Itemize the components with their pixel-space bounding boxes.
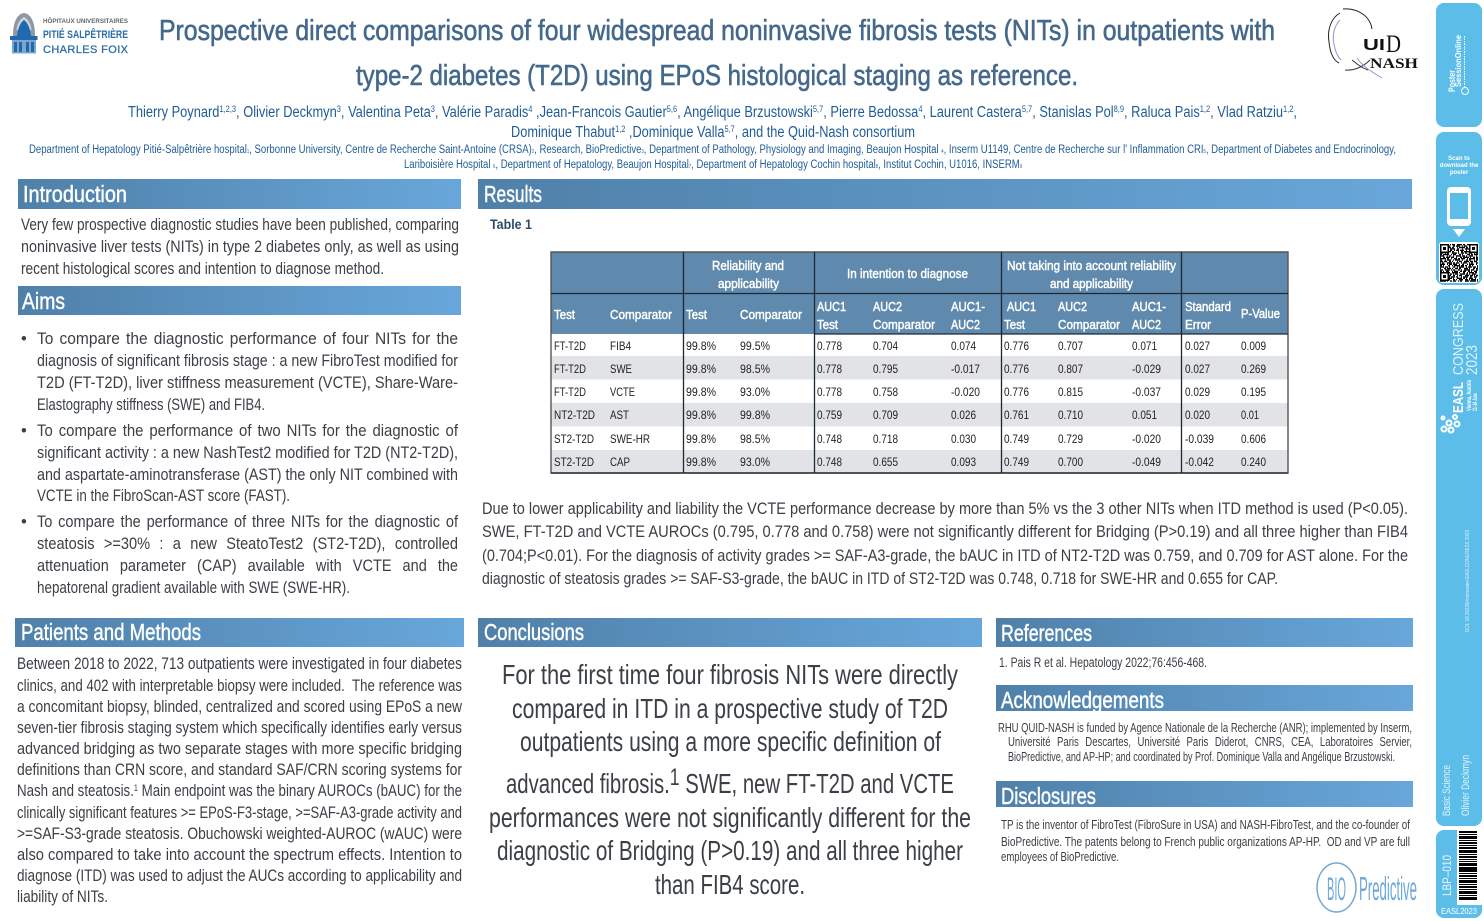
panel: references: References bbox=[1001, 620, 1092, 646]
panel: results: Table 1 bbox=[490, 217, 532, 232]
table header: AUC1 bbox=[817, 300, 846, 314]
table header: P-Value bbox=[1241, 307, 1280, 321]
table row 4: 0.026 bbox=[951, 408, 976, 422]
table row 1 bbox=[554, 339, 1266, 353]
table row 1: 0.704 bbox=[873, 339, 898, 353]
table row 6: -0.049 bbox=[1132, 455, 1161, 469]
panel: patients and methods: Between 2018 to 2022, 713 outpatients were investigated in four diabetes bbox=[17, 655, 462, 673]
table row 2: 0.027 bbox=[1185, 362, 1210, 376]
table row 5: 0.749 bbox=[1004, 432, 1029, 446]
authors: 5,7 bbox=[724, 124, 735, 134]
panel: aims: hepatorenal gradient available with SWE (SWE-HR). bbox=[37, 579, 350, 597]
table row 3: 0.776 bbox=[1004, 385, 1029, 399]
table row 2: FT-T2D bbox=[554, 362, 586, 376]
affiliations: Department of Hepatology Pitié-Salpêtrière hospital1, Sorbonne University, Centre de Recherche Saint-Antoine (CRSA)2, Research, BioPredictive3, Department of Pathology, Physiology and Imaging, Beaujon Hospital 4, Inserm U1149, Centre de Recherche sur l' Inflammation CRI5, Department of Diabetes and Endocrinology, bbox=[29, 144, 1396, 156]
panel: patients and methods: >=SAF-S3-grade steatosis. Obuchowski weighted-AUROC (wAUC) were bbox=[17, 825, 462, 843]
affiliations: Lariboisière Hospital 6, Department of Hepatology, Beaujon Hospital7, Department of Hepatology Cochin hospital8, Institut Cochin, U1016, INSERM9 bbox=[404, 159, 1022, 171]
authors: 3 bbox=[337, 104, 341, 114]
table row 1: FT-T2D bbox=[554, 339, 586, 353]
panel: conclusions: performances were not significantly different for the bbox=[489, 802, 971, 833]
panel: patients and methods: diagnose (ITD) was used to adjust the AUCs according to applicability and bbox=[17, 867, 462, 885]
panel: patients and methods: 1 bbox=[134, 783, 138, 793]
logo: UID NASH: D bbox=[1386, 31, 1401, 58]
panel: patients and methods: definitions than CRN score, and standard SAF/CRN scoring systems for bbox=[17, 761, 462, 779]
table row 3: FT-T2D bbox=[554, 385, 586, 399]
table row 2: 0.795 bbox=[873, 362, 898, 376]
table row 1: 99.8% bbox=[686, 339, 716, 353]
table header: and applicability bbox=[1050, 277, 1134, 291]
table row 2 bbox=[554, 362, 1266, 376]
table header: Comparator bbox=[1058, 318, 1120, 332]
table row 5: 0.748 bbox=[817, 432, 842, 446]
panel: conclusions: SWE, new FT-T2D and VCTE bbox=[680, 768, 954, 799]
logo: UID NASH: NASH bbox=[1370, 56, 1418, 72]
panel: patients and methods: clinics, and 402 with interpretable biopsy were included. The reference was bbox=[17, 677, 462, 695]
panel: patients and methods: a concomitant biopsy, blinded, centralized and scored using EPoS a new bbox=[17, 698, 462, 716]
icon: EASL flower bbox=[1442, 415, 1460, 432]
table row 4 bbox=[554, 408, 1259, 422]
table header: Comparator bbox=[873, 318, 935, 332]
logo: Pitié Salpêtrière Charles Foix bbox=[10, 13, 129, 56]
table row 6: 0.093 bbox=[951, 455, 976, 469]
table header: Not taking into account reliability bbox=[1007, 259, 1177, 273]
panel: patients and methods: clinically significant features >= EPoS-F3-stage, >=SAF-A3-grade activity and bbox=[17, 804, 462, 822]
table row 5: 98.5% bbox=[740, 432, 770, 446]
authors: , Valérie Paradis bbox=[435, 104, 528, 121]
sidebar panel: poster id and barcode bbox=[1436, 830, 1484, 918]
table row 5: ST2-T2D bbox=[554, 432, 594, 446]
panel: aims: • bbox=[21, 330, 27, 348]
table row 5: 0.729 bbox=[1058, 432, 1083, 446]
table header: applicability bbox=[718, 277, 780, 291]
table header: Comparator bbox=[610, 308, 672, 322]
table row 3: 0.815 bbox=[1058, 385, 1083, 399]
table row 1: 99.5% bbox=[740, 339, 770, 353]
authors bbox=[128, 104, 1297, 141]
table row 2: -0.029 bbox=[1132, 362, 1161, 376]
table row 1: 0.027 bbox=[1185, 339, 1210, 353]
table row 1: 0.009 bbox=[1241, 339, 1266, 353]
table row 6: 0.655 bbox=[873, 455, 898, 469]
sidebar panel: scan to download: download the bbox=[1440, 163, 1479, 169]
panel: introduction: Very few prospective diagnostic studies have been published, comparing bbox=[21, 216, 459, 234]
table row 1: 0.778 bbox=[817, 339, 842, 353]
table row 3: -0.020 bbox=[951, 385, 980, 399]
panel: conclusions: outpatients using a more specific definition of bbox=[520, 726, 941, 757]
sidebar panel: EASL congress: 21–24 June bbox=[1473, 393, 1479, 411]
panel: aims: • bbox=[21, 422, 27, 440]
logo: UID NASH bbox=[1328, 9, 1418, 78]
logo: BioPredictive bbox=[1317, 863, 1417, 912]
table row 5: 99.8% bbox=[686, 432, 716, 446]
panel: results bbox=[478, 179, 1412, 588]
title: type-2 diabetes (T2D) using EPoS histological staging as reference. bbox=[356, 60, 1078, 92]
authors: 3 bbox=[431, 104, 435, 114]
table row 4: 0.759 bbox=[817, 408, 842, 422]
table row 5: -0.020 bbox=[1132, 432, 1161, 446]
panel: aims bbox=[18, 286, 461, 597]
panel: disclosures: employees of BioPredictive. bbox=[1001, 850, 1119, 864]
table row 2: 0.776 bbox=[1004, 362, 1029, 376]
authors: , Laurent Castera bbox=[922, 104, 1022, 121]
table row 6: CAP bbox=[610, 455, 630, 469]
authors: 1,2 bbox=[1283, 104, 1293, 114]
table row 3: 0.195 bbox=[1241, 385, 1266, 399]
table header: In intention to diagnose bbox=[847, 267, 968, 281]
table row 3: 0.029 bbox=[1185, 385, 1210, 399]
sidebar panel: poster session online: Poster bbox=[1447, 70, 1457, 92]
panel: conclusions: Conclusions bbox=[484, 619, 584, 645]
barcode bbox=[1459, 831, 1477, 900]
sidebar panel: poster id and barcode: EASL2023 bbox=[1441, 906, 1477, 916]
sidebar panel: EASL congress: DOI: 10.26226/morressier.EASLCONGRESS 2023 bbox=[1465, 530, 1471, 632]
panel: patients and methods: advanced bridging as two separate stages with more specific bridging bbox=[17, 740, 462, 758]
authors: , and the Quid-Nash consortium bbox=[735, 124, 915, 141]
sidebar panel: EASL congress: Basic Science bbox=[1441, 765, 1453, 816]
panel: acknowledgements bbox=[996, 685, 1413, 764]
panel: disclosures bbox=[996, 781, 1413, 864]
authors: Dominique Thabut bbox=[511, 124, 637, 141]
table row 3: VCTE bbox=[610, 385, 635, 399]
sidebar panel: poster session online bbox=[1436, 3, 1482, 127]
panel: conclusions: advanced fibrosis. bbox=[506, 768, 728, 799]
sidebar panel: EASL congress: EASL bbox=[1450, 382, 1467, 413]
logo: Pitié Salpêtrière Charles Foix: PITIÉ SALPÊTRIÈRE bbox=[43, 28, 128, 41]
table header: Test bbox=[554, 308, 575, 322]
panel: introduction bbox=[18, 179, 461, 278]
sidebar panel: scan to download bbox=[1436, 132, 1482, 285]
table header: Standard bbox=[1185, 300, 1231, 314]
table header: Error bbox=[1185, 318, 1211, 332]
table row 5: -0.039 bbox=[1185, 432, 1214, 446]
table row 1: 0.071 bbox=[1132, 339, 1157, 353]
table row 4: 0.051 bbox=[1132, 408, 1157, 422]
logo: BioPredictive: BIO bbox=[1327, 871, 1346, 907]
panel: aims: To compare the performance of three NITs for the diagnostic of bbox=[37, 513, 458, 531]
authors: , Pierre Bedossa bbox=[823, 104, 919, 121]
panel: aims: Elastography stiffness (SWE) and FIB4. bbox=[37, 396, 265, 414]
sidebar panel: EASL congress: CONGRESS bbox=[1450, 303, 1467, 375]
panel: references: 1. Pais R et al. Hepatology 2022;76:456-468. bbox=[999, 655, 1207, 670]
table header: Test bbox=[686, 308, 707, 322]
panel: introduction: recent histological scores and intention to diagnose method. bbox=[21, 260, 384, 278]
panel: patients and methods: liability of NITs. bbox=[17, 888, 108, 906]
panel: conclusions: diagnostic of Bridging (P>0.19) and all three higher bbox=[497, 835, 963, 866]
table header: AUC1- bbox=[951, 300, 985, 314]
results text bbox=[482, 500, 1408, 588]
table row 6: ST2-T2D bbox=[554, 455, 594, 469]
panel: conclusions: than FIB4 score. bbox=[655, 869, 805, 900]
affiliations bbox=[29, 144, 1396, 171]
table row 5: 0.718 bbox=[873, 432, 898, 446]
authors: ,Jean-Francois Gautier bbox=[532, 104, 667, 121]
table header: AUC2 bbox=[1058, 300, 1087, 314]
table header: AUC2 bbox=[873, 300, 902, 314]
table row 1: 0.707 bbox=[1058, 339, 1083, 353]
panel: acknowledgements: Acknowledgements bbox=[1001, 687, 1164, 713]
table header: AUC2 bbox=[1132, 318, 1161, 332]
table row 5: 0.030 bbox=[951, 432, 976, 446]
table row 3: -0.037 bbox=[1132, 385, 1161, 399]
logo: Pitié Salpêtrière Charles Foix: HÔPITAUX UNIVERSITAIRES bbox=[43, 16, 129, 25]
table row 4: 0.020 bbox=[1185, 408, 1210, 422]
panel: references bbox=[996, 618, 1413, 670]
table header: Comparator bbox=[740, 308, 802, 322]
table row 3: 0.778 bbox=[817, 385, 842, 399]
authors: , Angélique Brzustowski bbox=[677, 104, 813, 121]
table row 5 bbox=[554, 432, 1266, 446]
table row 4: 0.761 bbox=[1004, 408, 1029, 422]
panel: patients and methods: Nash and steatosis. bbox=[17, 782, 162, 800]
sidebar panel: poster session online: SessionOnline bbox=[1453, 35, 1463, 87]
panel: aims: • bbox=[21, 513, 27, 531]
table row 4: NT2-T2D bbox=[554, 408, 595, 422]
sidebar panel: scan to download: poster bbox=[1450, 170, 1469, 176]
sidebar panel: EASL congress bbox=[1436, 289, 1482, 826]
table header: AUC1- bbox=[1132, 300, 1166, 314]
table row 4: AST bbox=[610, 408, 630, 422]
table row 6: 0.240 bbox=[1241, 455, 1266, 469]
authors: , Raluca Pais bbox=[1124, 104, 1200, 121]
table row 3: 93.0% bbox=[740, 385, 770, 399]
panel: patients and methods bbox=[15, 618, 464, 906]
table row 2: 0.807 bbox=[1058, 362, 1083, 376]
table row 1: 0.074 bbox=[951, 339, 976, 353]
sidebar panel: scan to download: Scan to bbox=[1448, 156, 1470, 162]
authors: , Stanislas Pol bbox=[1032, 104, 1114, 121]
table row 1: 0.776 bbox=[1004, 339, 1029, 353]
authors: , bbox=[1293, 104, 1297, 121]
table header: AUC2 bbox=[951, 318, 980, 332]
title bbox=[159, 15, 1275, 92]
table header: Test bbox=[1004, 318, 1025, 332]
table row 2: 0.269 bbox=[1241, 362, 1266, 376]
table row 3 bbox=[554, 385, 1266, 399]
sidebar panel: EASL congress: Olivier Deckmyn bbox=[1460, 755, 1472, 816]
table row 5: SWE-HR bbox=[610, 432, 650, 446]
authors: , Valentina Peta bbox=[341, 104, 431, 121]
panel: aims: To compare the performance of two NITs for the diagnostic of bbox=[37, 422, 458, 440]
table row 6: 93.0% bbox=[740, 455, 770, 469]
table row 2: SWE bbox=[610, 362, 632, 376]
logo: Pitié Salpêtrière Charles Foix: CHARLES FOIX bbox=[43, 44, 129, 56]
panel: aims: diagnosis of significant fibrosis stage : a new FibroTest modified for bbox=[37, 352, 458, 370]
panel: aims: To compare the diagnostic performance of four NITs for the bbox=[37, 330, 458, 348]
table row 6: 0.748 bbox=[817, 455, 842, 469]
table row 4: 0.709 bbox=[873, 408, 898, 422]
table row 2: 0.778 bbox=[817, 362, 842, 376]
panel: aims: attenuation parameter (CAP) available with VCTE and the bbox=[37, 557, 458, 575]
panel: introduction: Introduction bbox=[23, 181, 127, 207]
table row 6: 0.700 bbox=[1058, 455, 1083, 469]
panel: aims: and aspartate-aminotransferase (AST) the only NIT combined with bbox=[37, 466, 458, 484]
icon: arrow down bbox=[1453, 229, 1465, 237]
authors: 1,2 bbox=[615, 124, 625, 134]
authors: 5,6 bbox=[667, 104, 677, 114]
table row 4: 99.8% bbox=[686, 408, 716, 422]
sidebar panel: EASL congress: Vienna, Austria bbox=[1466, 380, 1473, 411]
panel: patients and methods: Patients and Methods bbox=[21, 619, 201, 645]
panel: disclosures: Disclosures bbox=[1001, 783, 1096, 809]
table header: Test bbox=[817, 318, 838, 332]
QR code bbox=[1439, 242, 1479, 283]
panel: aims: Aims bbox=[22, 288, 65, 314]
panel: aims: significant activity : a new NashTest2 modified for T2D (NT2-T2D), bbox=[37, 444, 458, 462]
authors: 8,9 bbox=[1114, 104, 1124, 114]
panel: patients and methods: also compared to take into account the spectrum effects. Intention to bbox=[17, 846, 462, 864]
authors: 4 bbox=[918, 104, 922, 114]
panel: patients and methods: Main endpoint was the binary AUROCs (bAUC) for the bbox=[138, 782, 462, 800]
panel: results: Results bbox=[484, 181, 542, 207]
table header: Reliability and bbox=[712, 259, 784, 273]
panel: conclusions: compared in ITD in a prospective study of T2D bbox=[512, 693, 948, 724]
sidebar panel: EASL congress: 2023 bbox=[1464, 345, 1481, 375]
icon: phone bbox=[1447, 187, 1471, 226]
table bbox=[551, 252, 1288, 473]
table row 2: 99.8% bbox=[686, 362, 716, 376]
panel: aims: T2D (FT-T2D), liver stiffness measurement (VCTE), Share-Ware- bbox=[37, 374, 458, 392]
authors: , Olivier Deckmyn bbox=[236, 104, 337, 121]
table row 4: 99.8% bbox=[740, 408, 770, 422]
table row 4: 0.01 bbox=[1241, 408, 1259, 422]
sidebar panel: poster id and barcode: LBP–010 bbox=[1440, 855, 1454, 896]
authors: 1,2,3 bbox=[219, 104, 236, 114]
table row 6: -0.042 bbox=[1185, 455, 1214, 469]
authors: 5,7 bbox=[1022, 104, 1032, 114]
table header bbox=[554, 259, 1280, 332]
logo: UID NASH: UI bbox=[1363, 37, 1385, 54]
authors: ,Dominique Valla bbox=[625, 124, 725, 141]
table row 2: 98.5% bbox=[740, 362, 770, 376]
panel: conclusions bbox=[478, 618, 982, 900]
table header: AUC1 bbox=[1007, 300, 1036, 314]
table row 2: -0.017 bbox=[951, 362, 980, 376]
table row 6: 99.8% bbox=[686, 455, 716, 469]
table row 6 bbox=[554, 455, 1266, 469]
panel: aims: steatosis >=30% : a new SteatoTest2 (ST2-T2D), controlled bbox=[37, 535, 458, 553]
table row 5: 0.606 bbox=[1241, 432, 1266, 446]
table row 3: 0.758 bbox=[873, 385, 898, 399]
authors: Thierry Poynard bbox=[128, 104, 238, 121]
table row 3: 99.8% bbox=[686, 385, 716, 399]
panel: conclusions: For the first time four fibrosis NITs were directly bbox=[502, 659, 958, 690]
panel: aims: VCTE in the FibroScan-AST score (FAST). bbox=[37, 487, 290, 505]
title: Prospective direct comparisons of four widespread noninvasive fibrosis tests (NITs) in outpatients with bbox=[159, 15, 1275, 47]
authors: , Vlad Ratziu bbox=[1210, 104, 1283, 121]
panel: patients and methods: seven-tier fibrosis staging system which specifically identifies early versus bbox=[17, 719, 462, 737]
results text: diagnostic of steatosis grades >= SAF-S3-grade, the bAUC in ITD of ST2-T2D was 0.748, 0.718 for SWE-HR and 0.655 for CAP. bbox=[482, 570, 1278, 588]
panel: conclusions: 1 bbox=[670, 764, 680, 791]
authors: 1,2 bbox=[1200, 104, 1210, 114]
table row 1: FIB4 bbox=[610, 339, 631, 353]
table row 6: 0.749 bbox=[1004, 455, 1029, 469]
panel: introduction: noninvasive liver tests (NITs) in type 2 diabetes only, as well as using bbox=[21, 238, 459, 256]
authors: 4 bbox=[528, 104, 532, 114]
authors: 5,7 bbox=[813, 104, 823, 114]
table row 4: 0.710 bbox=[1058, 408, 1083, 422]
